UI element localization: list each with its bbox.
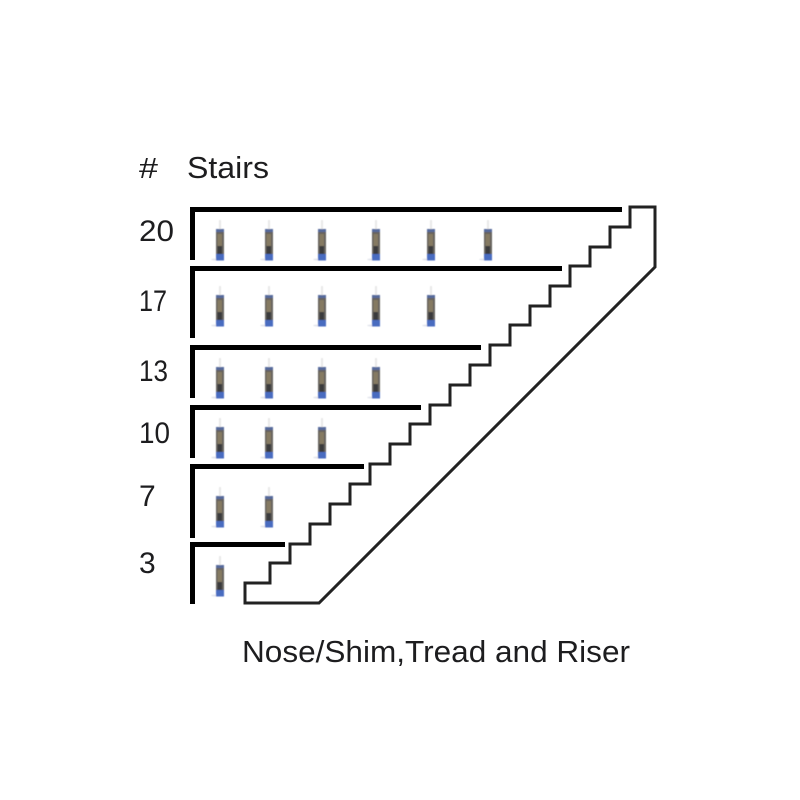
label: 13: 13 (139, 355, 168, 388)
row: 13 stairs (139, 348, 481, 398)
bracket: 20 stairs (192, 210, 622, 260)
staircase outline (245, 207, 655, 603)
label: 10: 10 (139, 417, 170, 450)
bracket: 3 stairs (192, 544, 285, 604)
row: 7 stairs (139, 466, 364, 538)
tubes: 2 (211, 487, 273, 528)
bracket: 7 stairs (192, 466, 364, 538)
bracket: 10 stairs (192, 408, 421, 458)
bracket: 17 stairs (192, 268, 562, 338)
row: 20 stairs (139, 210, 622, 260)
label: 20: 20 (139, 215, 174, 248)
label: 7: 7 (139, 480, 156, 513)
label: 17: 17 (139, 285, 167, 318)
tubes: 3 (211, 418, 326, 458)
row: 10 stairs (139, 408, 421, 458)
label: 3: 3 (139, 547, 156, 580)
tube: 1 (211, 556, 224, 596)
tubes: 6 (211, 220, 492, 260)
column heading: stairs: Stairs (187, 150, 269, 185)
row: 3 stairs (139, 544, 285, 604)
caption: Nose/Shim,Tread and Riser (242, 634, 630, 669)
tubes: 4 (211, 358, 380, 398)
tubes: 5 (211, 286, 435, 326)
bracket: 13 stairs (192, 348, 481, 398)
column heading: number: # (139, 153, 158, 185)
row: 17 stairs (139, 268, 562, 338)
